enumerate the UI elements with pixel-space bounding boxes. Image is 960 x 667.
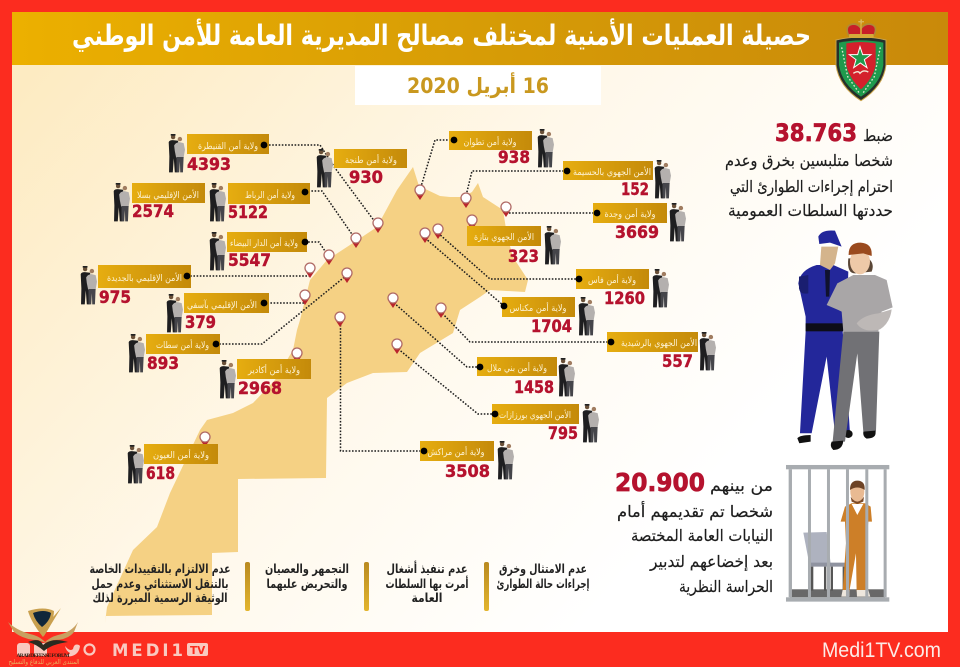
- station: Ouarzazate: الأمن الجهوي بورزازات: [499, 409, 571, 421]
- stat block: 20.900: من بينهم: [710, 476, 773, 496]
- station: Agadir: [220, 359, 311, 398]
- stat block: 38.763: 38.763: [775, 119, 857, 147]
- station: Casablanca: 5547: [228, 251, 271, 270]
- station: Meknes: 1704: [531, 317, 572, 336]
- cause 1: عدم الامتثال وخرق: [499, 561, 587, 577]
- cause 3: والتحريض عليهما: [266, 576, 348, 591]
- social icons: [17, 643, 94, 656]
- station: Marrakech: 3508: [445, 462, 490, 481]
- station: Fes: [576, 269, 669, 308]
- station: Casablanca: [210, 232, 308, 270]
- cause 1: إجراءات حالة الطوارئ: [496, 576, 590, 591]
- stat block: 20.900: شخصا تم تقديمهم أمام: [617, 501, 773, 522]
- station: Ouarzazate: 795: [548, 424, 578, 443]
- date box: [355, 66, 601, 105]
- stat block: 38.763: شخصا متلبسين بخرق وعدم: [725, 151, 893, 171]
- stat block: 20.900: 20.900: [615, 468, 705, 497]
- station: Safi: الأمن الإقليمي بآسفي: [187, 299, 257, 311]
- station: El Jadida: [81, 265, 191, 307]
- cause 1: [484, 561, 590, 611]
- station: Al Hoceima: الأمن الجهوي بالحسيمة: [573, 166, 651, 178]
- station: Tetouan: [449, 129, 554, 167]
- station: Fes: ولاية أمن فاس: [588, 274, 636, 286]
- station: Meknes: [501, 297, 595, 336]
- cause 3: التجمهر والعصيان: [265, 561, 349, 576]
- station: Settat: ولاية أمن سطات: [156, 339, 209, 351]
- map of Morocco: [105, 167, 528, 623]
- station: Errachidia: الأمن الجهوي بالرشيدية: [621, 337, 697, 349]
- footer website: Medi1TV.com: [822, 639, 941, 662]
- station: Beni Mellal: 1458: [514, 378, 554, 397]
- Medi1 TV logo: TV: [190, 645, 206, 657]
- station: Oujda: 3669: [615, 223, 659, 242]
- station: Ouarzazate: [492, 404, 599, 443]
- station: Tetouan: 938: [498, 148, 530, 167]
- cause 2: عدم تنفيذ أشغال: [386, 560, 468, 577]
- stat block: 38.763: ضبط: [863, 126, 893, 145]
- station: Laayoune: 618: [146, 464, 175, 483]
- station: Tangier: ولاية أمن طنجة: [345, 154, 397, 166]
- station: Tetouan: ولاية أمن تطوان: [464, 136, 516, 148]
- watermark: forum logo: ARAB DEFENSE FORUM: [16, 653, 70, 659]
- station: Settat: [129, 334, 220, 373]
- stat block: 20.900: النيابات العامة المختصة: [631, 526, 773, 545]
- illustration: officer holding suspect: [797, 230, 893, 450]
- station: Marrakech: [420, 441, 514, 481]
- station: Rabat: [210, 183, 310, 222]
- station: Sale: الأمن الإقليمي بسلا: [137, 189, 199, 201]
- cause 4: [90, 561, 230, 605]
- station: Fes: 1260: [604, 289, 645, 308]
- station: Kenitra: 4393: [187, 155, 231, 174]
- station: El Jadida: 975: [99, 288, 131, 307]
- station: Kenitra: [169, 134, 269, 174]
- header band: [12, 12, 948, 65]
- cause 4: عدم الالتزام بالتقييدات الخاصة: [90, 561, 230, 577]
- station: Meknes: ولاية أمن مكناس: [510, 302, 566, 314]
- station: Beni Mellal: [477, 357, 575, 397]
- station: Settat: 893: [147, 354, 179, 373]
- station: Agadir: 2968: [238, 379, 282, 398]
- stat block: 20.900: بعد إخضاعهم لتدبير: [649, 552, 773, 572]
- date text: 16 أبريل 2020: [407, 71, 549, 98]
- stat block: 38.763: حددتها السلطات العمومية: [728, 201, 893, 221]
- cause 2: [364, 560, 468, 611]
- station: Agadir: ولاية أمن أكادير: [247, 364, 300, 376]
- illustration: prisoner behind bars: [786, 465, 889, 602]
- station: Oujda: [593, 203, 686, 242]
- cause 4: الوثيقة الرسمية المبررة لذلك: [92, 590, 228, 605]
- station: Tangier: 930: [349, 168, 383, 187]
- station: Sale: 2574: [132, 202, 174, 221]
- station: El Jadida: الأمن الإقليمي بالجديدة: [107, 272, 182, 284]
- watermark: forum logo: المنتدى العربي للدفاع والتسليح: [8, 658, 80, 666]
- station: Al Hoceima: 152: [621, 180, 649, 199]
- station: Sale: [114, 183, 205, 221]
- stat block: 20.900: الحراسة النظرية: [679, 577, 773, 597]
- Medi1 TV logo: MEDI1: [112, 641, 183, 660]
- station: Rabat: ولاية أمن الرباط: [245, 189, 295, 201]
- station: Taza: الأمن الجهوي بتازة: [474, 231, 534, 243]
- station: Beni Mellal: ولاية أمن بني ملال: [487, 362, 547, 374]
- station: Kenitra: ولاية أمن القنيطرة: [198, 140, 258, 152]
- emblem: police shield: [836, 19, 886, 101]
- station: Laayoune: [128, 444, 218, 483]
- station: Rabat: 5122: [228, 203, 268, 222]
- stat block: 20.900: [615, 468, 773, 597]
- cause 2: أمرت بها السلطات: [386, 575, 468, 591]
- cause 4: بالتنقل الاستثنائي وعدم حمل: [92, 576, 228, 592]
- cause 3: [245, 561, 349, 611]
- station: Oujda: ولاية أمن وجدة: [604, 208, 656, 220]
- station: Safi: 379: [185, 313, 216, 332]
- leader lines: [187, 140, 611, 451]
- watermark: forum logo: [8, 608, 80, 666]
- station: Laayoune: ولاية أمن العيون: [153, 449, 209, 461]
- station: Casablanca: ولاية أمن الدار البيضاء: [230, 237, 298, 249]
- station: Taza: 323: [508, 247, 539, 266]
- station: Errachidia: 557: [662, 352, 693, 371]
- station: Errachidia: [607, 332, 716, 371]
- station: Taza: [467, 226, 561, 266]
- station: Al Hoceima: [563, 160, 671, 199]
- station: Safi: [167, 293, 269, 332]
- station: Tangier: [317, 149, 407, 187]
- stat block: 38.763: [725, 119, 893, 221]
- station: Marrakech: ولاية أمن مراكش: [428, 446, 484, 458]
- cause 2: العامة: [412, 590, 442, 605]
- stat block: 38.763: احترام إجراءات الطوارئ التي: [730, 177, 893, 197]
- map pins: [200, 185, 511, 447]
